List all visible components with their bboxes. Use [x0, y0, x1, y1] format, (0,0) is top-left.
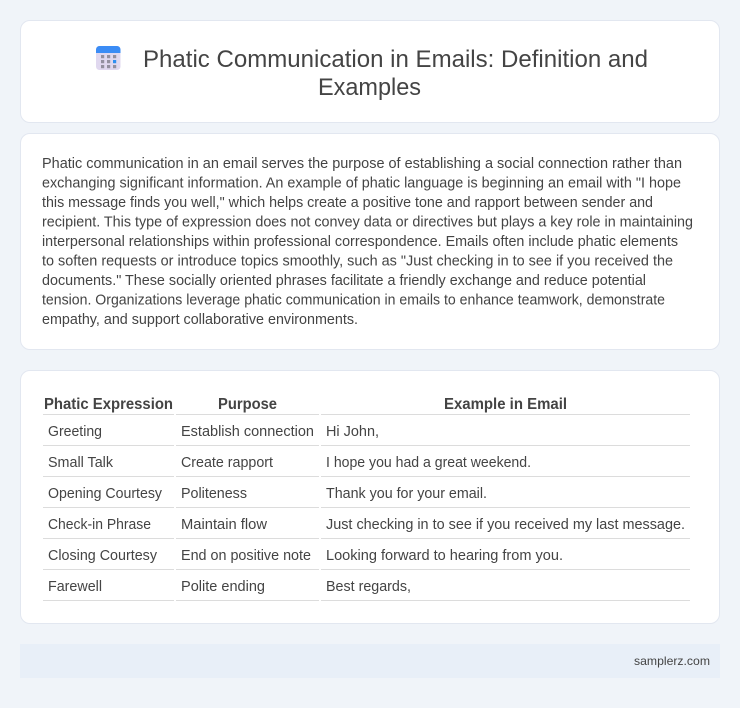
table rows: Establish connection [181, 424, 314, 440]
title [143, 46, 648, 101]
table rows: Best regards, [326, 579, 411, 595]
title: Examples [318, 74, 421, 101]
table rows [48, 424, 685, 595]
text block: intro paragraph [42, 156, 693, 328]
text block: intro paragraph: Phatic communication in an email serves the purpose of establishing a social connection rather than [42, 156, 682, 172]
table rules [43, 414, 690, 601]
table rows: I hope you had a great weekend. [326, 455, 531, 471]
table rows: Create rapport [181, 455, 273, 471]
text block: intro paragraph: exchanging significant information. An example of phatic language is beginning an email with "I hope [42, 176, 681, 192]
table header: Example in Email [444, 396, 567, 413]
text block: intro paragraph: interpersonal relationships within professional correspondence. Emails often include phatic elements [42, 234, 678, 250]
text block: intro paragraph: to soften requests or introduce topics smoothly, such as "Just checking in to see if you received the [42, 254, 673, 270]
table rows: Thank you for your email. [326, 486, 487, 502]
table rows: Opening Courtesy [48, 486, 163, 502]
table rows: Greeting [48, 424, 102, 440]
panel: footer [20, 644, 720, 678]
table rows: Looking forward to hearing from you. [326, 548, 563, 564]
panel: header [20, 20, 720, 123]
table rows: Farewell [48, 579, 102, 595]
table rows: Small Talk [48, 455, 114, 471]
table header: Purpose [218, 396, 277, 413]
text block: intro paragraph: documents." These socially oriented phrases facilitate a friendly exchange and reduce potential [42, 273, 646, 289]
table rows: Polite ending [181, 579, 265, 595]
text block: intro paragraph: this message finds you well," which helps create a positive tone and rapport between sender and [42, 195, 653, 211]
panel: table [20, 370, 720, 624]
table rows: End on positive note [181, 548, 311, 564]
table rows: Politeness [181, 486, 247, 502]
title: Phatic Communication in Emails: Definition and [143, 46, 648, 73]
footer text: samplerz.com [634, 654, 710, 668]
table rows: Closing Courtesy [48, 548, 158, 564]
table rows: Hi John, [326, 424, 379, 440]
table header: Phatic Expression [44, 396, 173, 413]
table rows: Check-in Phrase [48, 517, 151, 533]
table rows: Just checking in to see if you received my last message. [326, 517, 685, 533]
panel: intro paragraph [20, 133, 720, 350]
table: phatic expressions [43, 396, 690, 601]
text block: intro paragraph: tension. Organizations leverage phatic communication in emails to enhance teamwork, demonstrate [42, 292, 665, 308]
table header [44, 396, 567, 413]
text block: intro paragraph: empathy, and support collaborative environments. [42, 312, 358, 328]
text block: intro paragraph: recipient. This type of expression does not convey data or directives but plays a key role in maintaining [42, 214, 693, 230]
icon: calendar [96, 46, 120, 70]
table rows: Maintain flow [181, 517, 268, 533]
